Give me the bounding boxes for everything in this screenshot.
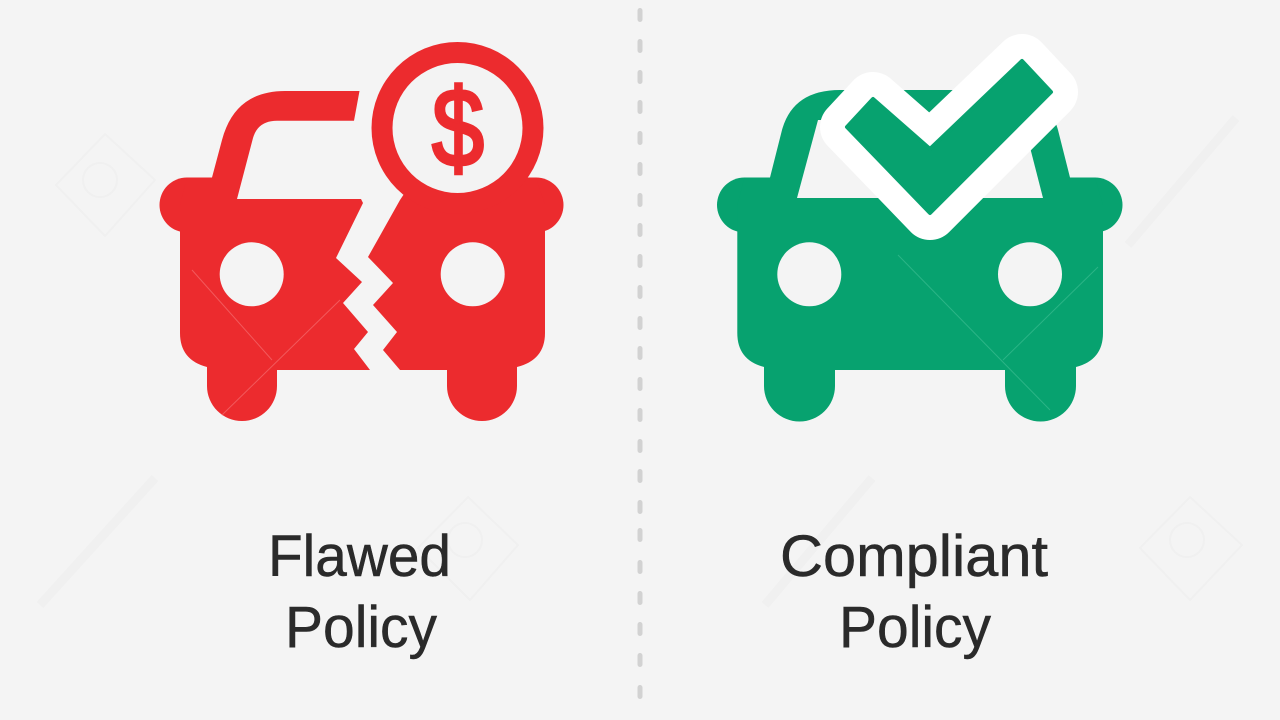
right half of broken car (368, 160, 564, 421)
label: Flawed Policy: Flawed (268, 524, 451, 589)
dollar coin: $ (432, 67, 484, 190)
label: Compliant Policy (780, 524, 1048, 660)
green car body (717, 90, 1122, 422)
label: Compliant Policy: Compliant (780, 524, 1048, 589)
icon: compliant green car with check mark (717, 61, 1122, 422)
divider: dashed vertical line (638, 8, 642, 699)
dollar coin (372, 42, 544, 214)
icon: broken red car with dollar coin (160, 42, 564, 421)
label: Flawed Policy (268, 524, 451, 660)
check mark with white outline (847, 61, 1051, 213)
label: Flawed Policy: Policy (285, 595, 437, 660)
label: Compliant Policy: Policy (839, 595, 991, 660)
left half of broken car (160, 91, 370, 421)
